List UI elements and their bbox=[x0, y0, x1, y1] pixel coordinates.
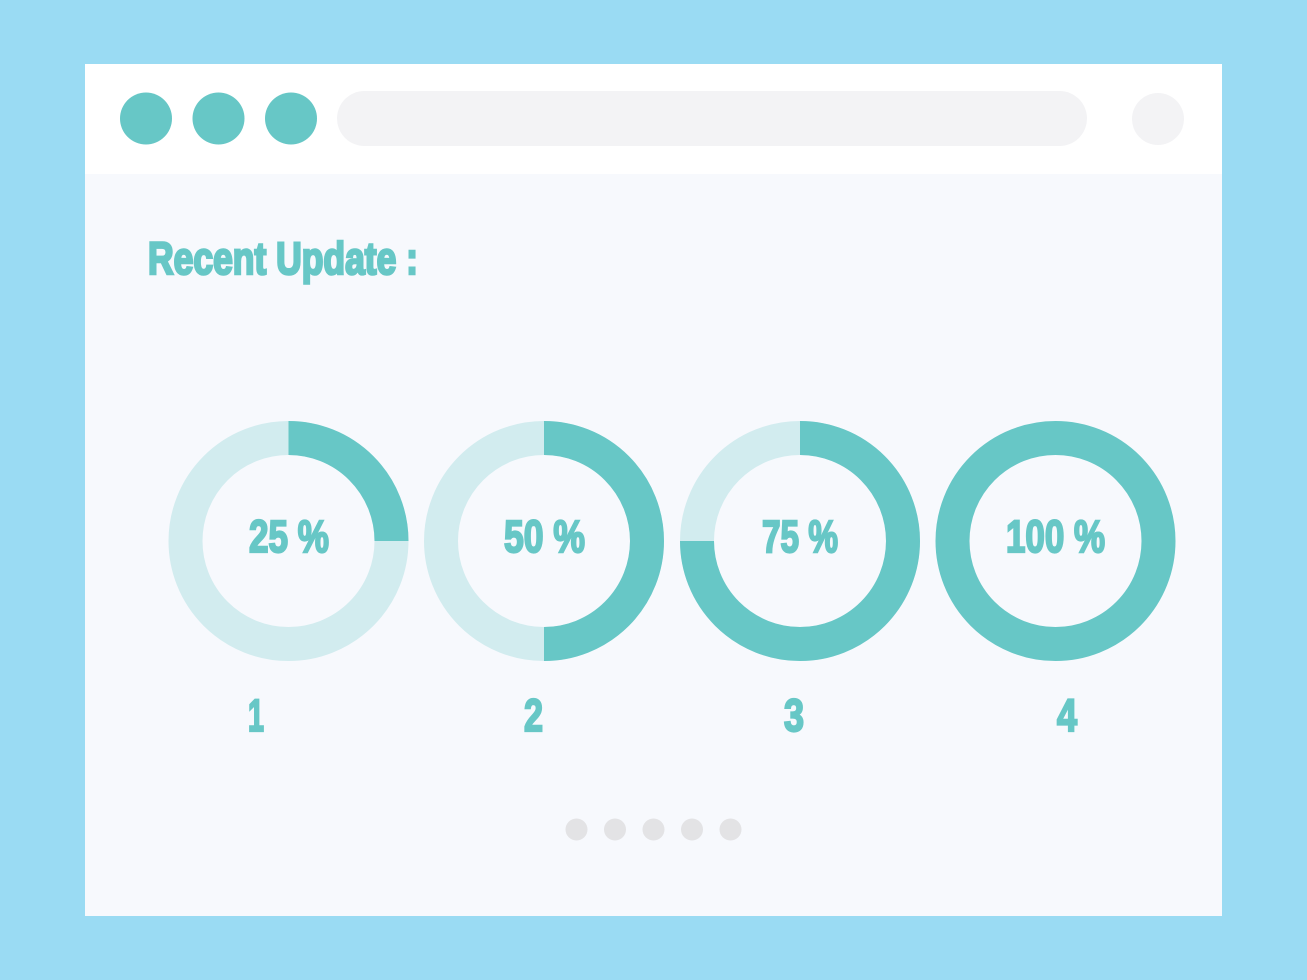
chart: donut 50 percent bbox=[441, 438, 647, 644]
icon: toolbar circle button bbox=[1132, 93, 1184, 145]
value label: 25 % bbox=[249, 511, 329, 562]
chart: donut 100 percent bbox=[952, 438, 1158, 644]
value label: 75 % bbox=[762, 511, 838, 562]
item number 4: 4 bbox=[1057, 690, 1077, 741]
item number 3: 3 bbox=[784, 690, 804, 741]
icon: window button 2 bbox=[192, 92, 244, 144]
item number 2: 2 bbox=[524, 690, 543, 741]
icon: window button 3 bbox=[265, 92, 317, 144]
address bar bbox=[337, 91, 1087, 146]
title: Recent Update : bbox=[148, 233, 418, 284]
icon: window button 1 bbox=[120, 92, 172, 144]
panel: browser window bbox=[85, 64, 1222, 916]
value label: 100 % bbox=[1006, 511, 1105, 562]
chart: donut 25 percent bbox=[186, 438, 392, 644]
panel: toolbar bbox=[85, 64, 1222, 174]
chart: donut 75 percent bbox=[697, 438, 903, 644]
value label: 50 % bbox=[504, 511, 585, 562]
pagination dots bbox=[566, 818, 742, 840]
item number 1: 1 bbox=[248, 690, 264, 741]
